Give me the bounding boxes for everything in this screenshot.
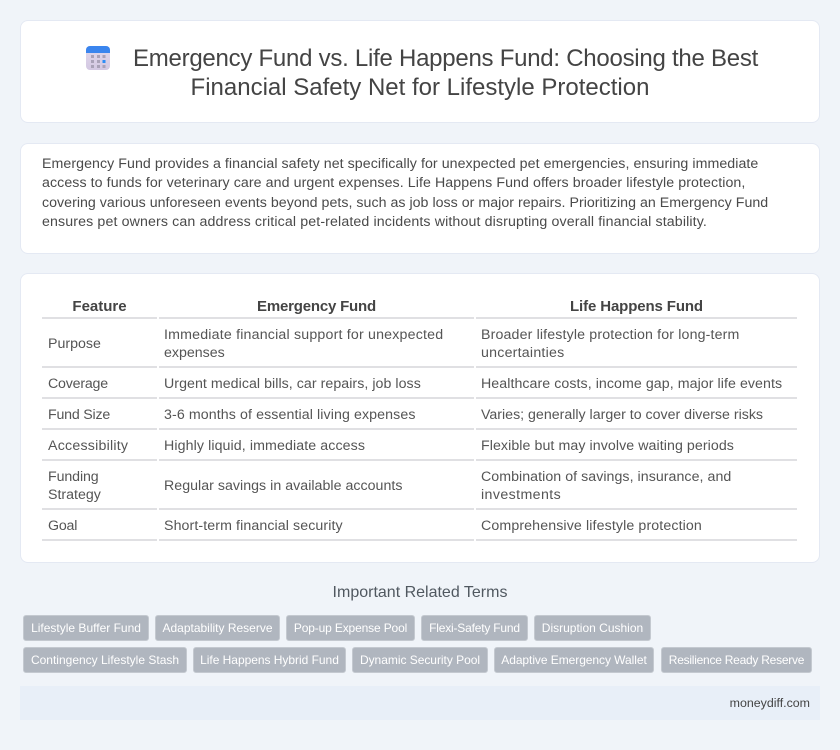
comparison table: Strategy (48, 487, 101, 503)
comparison table: Coverage (48, 376, 108, 392)
footer bar (20, 686, 820, 720)
panel: comparison table card (20, 273, 820, 563)
text block: description: ensures pet owners can address critical pet-related incidents without disrupting overall financial stability. (42, 214, 707, 230)
related term tags: Dynamic Security Pool (360, 653, 480, 667)
panel: title card (20, 20, 820, 123)
title: Financial Safety Net for Lifestyle Protection (191, 74, 649, 101)
comparison table: Short-term financial security (164, 518, 343, 534)
comparison table: Emergency Fund (257, 298, 376, 315)
comparison table: Immediate financial support for unexpected (164, 327, 443, 343)
comparison table: Combination of savings, insurance, and (481, 469, 731, 485)
comparison table: Feature (72, 298, 127, 315)
comparison table: Fund Size (48, 407, 110, 423)
comparison table: Varies; generally larger to cover diverse risks (481, 407, 763, 423)
comparison table: Highly liquid, immediate access (164, 438, 365, 454)
comparison table: Comprehensive lifestyle protection (481, 518, 702, 534)
related term tags: Contingency Lifestyle Stash (31, 653, 179, 667)
comparison table: Broader lifestyle protection for long-term (481, 327, 739, 343)
text block: description: Emergency Fund provides a financial safety net specifically for unexpected pet emergencies, ensuring immediate (42, 156, 758, 172)
related term tags: Pop-up Expense Pool (294, 621, 407, 635)
comparison table: Healthcare costs, income gap, major life events (481, 376, 782, 392)
title: Emergency Fund vs. Life Happens Fund: Choosing the Best (133, 45, 758, 72)
text block: description (42, 156, 768, 230)
comparison table: Urgent medical bills, car repairs, job loss (164, 376, 421, 392)
related term tags: Resilience Ready Reserve (669, 653, 804, 667)
comparison table (42, 298, 797, 541)
related term tags: Life Happens Hybrid Fund (200, 653, 339, 667)
related term tags: Flexi-Safety Fund (429, 621, 520, 635)
related term tags: Disruption Cushion (542, 621, 643, 635)
comparison table: Regular savings in available accounts (164, 478, 402, 494)
comparison table: uncertainties (481, 345, 564, 361)
text block: description: covering various unforeseen events beyond pets, such as job loss or major repairs. Prioritizing an Emergency Fund (42, 195, 768, 211)
icon: calendar (86, 46, 110, 70)
comparison table: Goal (48, 518, 77, 534)
footer source text: moneydiff.com (730, 696, 810, 710)
comparison table: Life Happens Fund (570, 298, 703, 315)
comparison table: 3-6 months of essential living expenses (164, 407, 416, 423)
comparison table: Purpose (48, 336, 101, 352)
related term tags: Adaptability Reserve (162, 621, 273, 635)
comparison table: Funding (48, 469, 99, 485)
comparison table: expenses (164, 345, 225, 361)
text block: description: access to funds for veterinary care and urgent expenses. Life Happens Fund offers broader lifestyle protection, (42, 175, 745, 191)
related term tags (23, 615, 812, 673)
related term tags: Adaptive Emergency Wallet (501, 653, 647, 667)
title (133, 45, 758, 101)
panel: description card (20, 143, 820, 254)
comparison table: investments (481, 487, 561, 503)
related term tags: Lifestyle Buffer Fund (31, 621, 141, 635)
comparison table: Accessibility (48, 438, 128, 454)
heading: related terms: Important Related Terms (333, 584, 507, 601)
comparison table: Flexible but may involve waiting periods (481, 438, 734, 454)
